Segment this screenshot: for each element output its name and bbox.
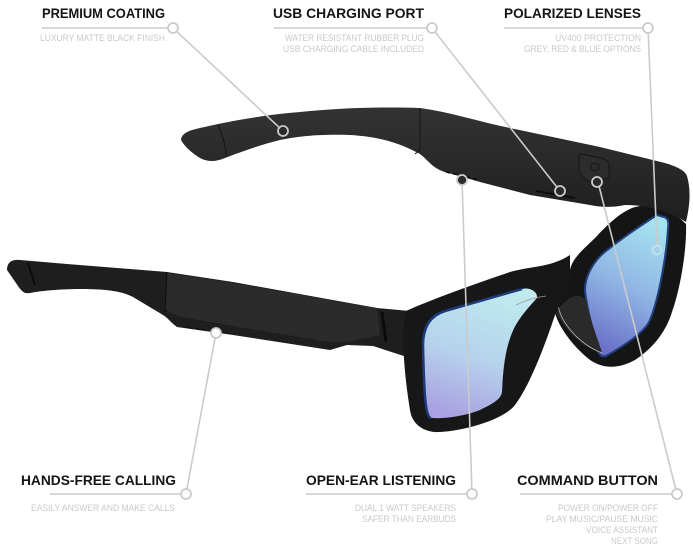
open-ear leader [306, 180, 472, 494]
usb detail: USB CHARGING CABLE INCLUDED [283, 44, 424, 54]
premium coating target node [278, 126, 288, 136]
premium coating top node [168, 23, 178, 33]
far lens frame [555, 206, 686, 367]
hands-free bottom node [181, 489, 191, 499]
power button [579, 154, 609, 181]
speaker holes [446, 172, 480, 180]
command detail: NEXT SONG [611, 536, 658, 546]
usb port [536, 191, 575, 198]
callout: polarized lenses [504, 5, 662, 254]
usb target node [555, 186, 565, 196]
command target node [592, 177, 602, 187]
near lens frame [403, 255, 570, 432]
far temple arm [181, 107, 690, 222]
usb leader [274, 28, 560, 191]
command heading: COMMAND BUTTON [517, 472, 658, 488]
command leader [520, 182, 677, 494]
glasses illustration [7, 107, 690, 432]
usb top node [427, 23, 437, 33]
usb detail [283, 33, 424, 54]
premium coating detail: LUXURY MATTE BLACK FINISH [40, 33, 165, 43]
callout: open-ear listening [306, 175, 477, 524]
callout: command button [517, 177, 682, 546]
polarized detail: GREY, RED & BLUE OPTIONS [524, 44, 641, 54]
polarized heading: POLARIZED LENSES [504, 5, 641, 21]
polarized detail: UV400 PROTECTION [555, 33, 641, 43]
command bottom node [672, 489, 682, 499]
command detail: POWER ON/POWER OFF [558, 503, 658, 513]
open-ear bottom node [467, 489, 477, 499]
command detail: VOICE ASSISTANT [586, 525, 658, 535]
command detail: PLAY MUSIC/PAUSE MUSIC [546, 514, 658, 524]
open-ear detail: DUAL 1 WATT SPEAKERS [355, 503, 456, 513]
usb heading: USB CHARGING PORT [273, 5, 424, 21]
callout: usb charging port [273, 5, 565, 196]
near temple arm [7, 260, 410, 358]
polarized target node [652, 246, 662, 254]
polarized top node [643, 23, 653, 33]
hands-free detail: EASILY ANSWER AND MAKE CALLS [31, 503, 175, 513]
callout: hands-free calling [21, 328, 221, 513]
premium coating heading: PREMIUM COATING [42, 5, 165, 21]
usb detail: WATER RESISTANT RUBBER PLUG [285, 33, 424, 43]
callout: premium coating [40, 5, 288, 136]
polarized detail [524, 33, 641, 54]
hands-free heading: HANDS-FREE CALLING [21, 472, 176, 488]
open-ear target node [457, 175, 467, 185]
command detail [546, 503, 658, 546]
hands-free leader [50, 333, 216, 494]
hands-free target node [211, 328, 221, 338]
microphone holes [186, 327, 206, 330]
open-ear detail: SAFER THAN EARBUDS [362, 514, 456, 524]
open-ear heading: OPEN-EAR LISTENING [306, 472, 456, 488]
premium coating leader [42, 28, 283, 131]
polarized leader [504, 28, 657, 245]
open-ear detail [355, 503, 456, 524]
